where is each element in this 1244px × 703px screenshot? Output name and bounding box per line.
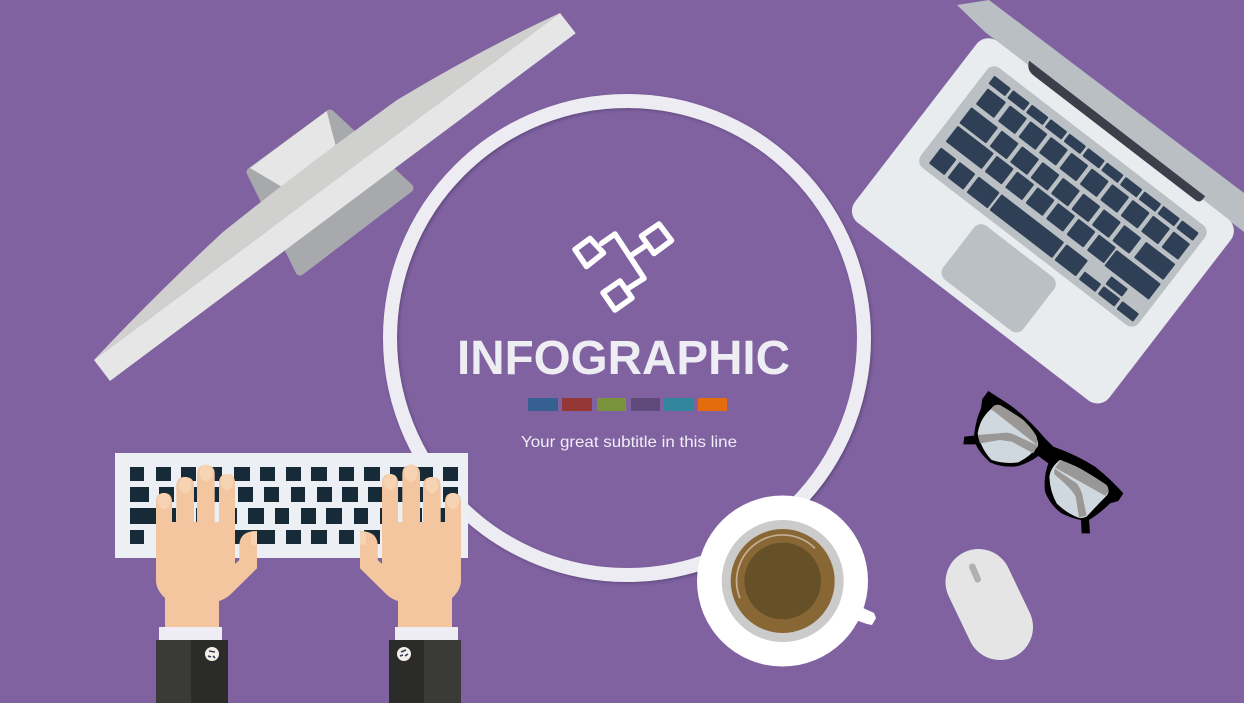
mouse body: [978, 582, 1000, 627]
right shirt cuff: [395, 627, 458, 640]
trackpad: [938, 221, 1059, 336]
cup handle: [850, 602, 876, 625]
laptop body: [846, 32, 1240, 409]
laptop hinge: [1024, 61, 1205, 203]
coffee cup: [697, 496, 876, 666]
laptop: [846, 0, 1244, 409]
glasses reflection right: [1054, 460, 1108, 518]
coffee centre: [744, 543, 821, 619]
colour swatches: [528, 398, 727, 411]
coffee highlight: [737, 535, 815, 598]
subtitle: Your great subtitle in this line: [521, 434, 737, 451]
glasses lens right: [1049, 460, 1108, 518]
left shirt cuff: [159, 627, 222, 640]
left cuff button: [205, 647, 219, 661]
monitor back curve: [94, 13, 560, 360]
laptop base group: [846, 29, 1242, 409]
keyboard base: [115, 453, 468, 558]
left fingernails: [158, 464, 257, 545]
desk keyboard: [115, 453, 468, 558]
right sleeve: [389, 640, 461, 703]
left hand shape: [156, 465, 257, 627]
monitor stand neck: [250, 111, 336, 187]
keyboard keys: [130, 467, 458, 544]
glasses frame: [963, 391, 1123, 533]
central ring: [390, 101, 864, 575]
monitor: [94, 13, 576, 381]
icon: flowchart: [575, 224, 672, 310]
monitor stand base: [251, 114, 409, 271]
monitor front edge: [94, 13, 576, 381]
right hand: [360, 464, 461, 703]
keyboard tray: [916, 63, 1210, 330]
right cuff button: [397, 647, 411, 661]
title: INFOGRAPHIC: [457, 332, 790, 385]
right hand shape: [360, 464, 461, 627]
mouse wheel: [972, 567, 978, 579]
cup rim: [722, 520, 844, 642]
left sleeve: [156, 640, 228, 703]
glasses: [963, 391, 1123, 533]
laptop lid: [957, 0, 1244, 232]
glasses reflection left: [978, 405, 1038, 453]
coffee: [731, 529, 835, 633]
saucer: [697, 496, 868, 666]
mouse: [972, 567, 1000, 627]
laptop keys: [927, 76, 1200, 322]
left hand: [156, 464, 257, 703]
glasses lens left: [978, 405, 1038, 463]
